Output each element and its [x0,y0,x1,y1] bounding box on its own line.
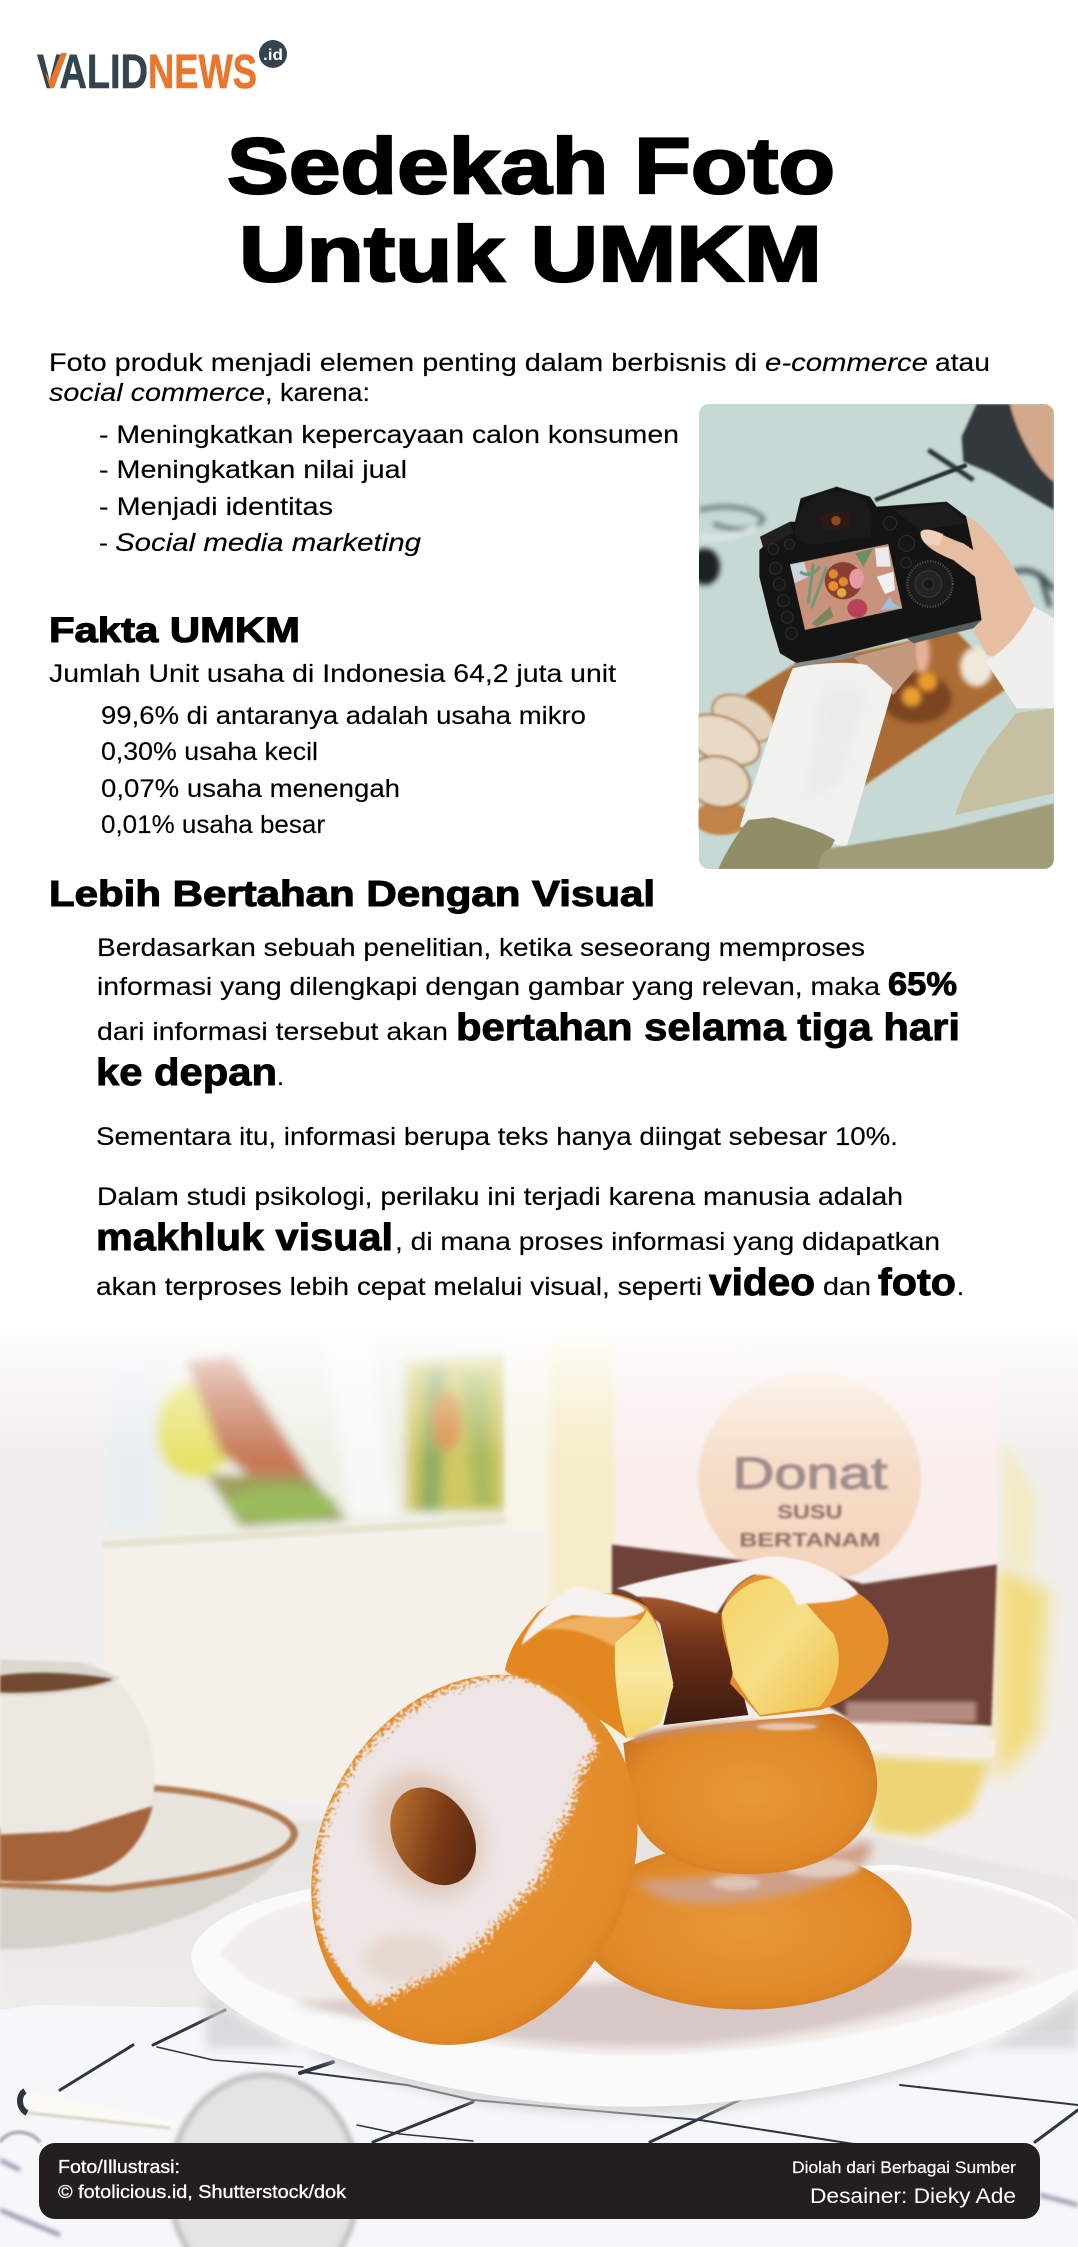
text block: UMKM facts: 0,07% usaha menengah [101,775,400,803]
paragraph: visual creatures: Dalam studi psikologi, perilaku ini terjadi karena manusia adalah [97,1183,903,1211]
text block: UMKM facts: 0,30% usaha kecil [101,738,318,766]
blurred cables and lens [690,507,1054,607]
broken donut [637,1593,748,1725]
white box [103,1517,557,1819]
footer bar [39,2143,1040,2219]
text block: UMKM facts: 0,01% usaha besar [101,811,325,839]
softbox and stand [962,404,1054,510]
paragraph: visual creatures: dan [823,1273,871,1301]
lower hand [853,642,917,695]
logo: VALIDNEWS.id: VALID [37,46,148,99]
paragraph: visual creatures: makhluk visual [96,1217,393,1259]
paragraph: research: bertahan selama tiga hari [456,1007,960,1049]
list: reasons: - [99,529,108,557]
paragraph: research: . [277,1063,284,1091]
top fade to white [0,1270,1078,1460]
list: reasons [99,421,679,557]
paragraph: visual creatures: foto [878,1262,956,1304]
donut package: BERTANAM [739,1530,880,1551]
title [227,121,835,298]
source and designer: Diolah dari Berbagai Sumber [792,2158,1016,2177]
list: reasons: - Meningkatkan kepercayaan calon konsumen [99,421,679,449]
left chunk [505,1592,673,1738]
donut package: Donat [733,1449,887,1499]
donut package [550,1336,1048,1836]
intro text [49,349,990,407]
photo: donuts on a plate [0,1270,1078,2247]
top stack: middle and broken donuts [505,1557,889,1874]
logo: VALIDNEWS.id: NEWS [148,46,257,99]
logo: VALIDNEWS.id: .id [263,47,283,64]
paragraph: visual creatures: video [709,1262,815,1304]
camera body [759,487,982,667]
paragraph: research: Berdasarkan sebuah penelitian, ketika seseorang memproses [97,934,865,962]
camera buttons [768,517,915,639]
white sleeves [985,607,1054,708]
paragraph: research [96,934,960,1094]
intro text: , karena: [265,379,370,407]
blurred picture frame [120,1352,508,1532]
paragraph: research: 65% [888,966,957,1002]
photo credit: Foto/Illustrasi: [58,2157,180,2177]
title: Untuk UMKM [239,209,822,298]
right hand [920,516,1034,657]
camera dial [907,561,953,607]
heading: Fakta UMKM: Fakta UMKM [49,611,300,650]
text block: UMKM facts: Jumlah Unit usaha di Indonesia 64,2 juta unit [49,660,616,688]
title: Sedekah Foto [227,121,835,210]
intro text: atau [935,349,990,377]
middle donut [623,1713,877,1874]
list: reasons: Social media marketing [115,529,421,557]
source and designer [792,2158,1016,2208]
paragraph: visual creatures: akan terproses lebih cepat melalui visual, seperti [96,1273,702,1301]
list: reasons: - Menjadi identitas [99,493,333,521]
text block: UMKM facts: 99,6% di antaranya adalah usaha mikro [101,702,586,730]
paragraph: research: dari informasi tersebut akan [97,1018,448,1046]
list: reasons: - Meningkatkan nilai jual [99,456,407,484]
powdered sugar on top [617,1557,858,1613]
bread slices [698,692,774,837]
intro text: Foto produk menjadi elemen penting dalam berbisnis di [49,349,757,377]
plate and bottom donut [191,1840,1078,2115]
paragraph: visual creatures: . [957,1273,964,1301]
intro text: social commerce [49,379,265,407]
photo backdrop, package and cup [0,1340,1078,2032]
strainer [170,2075,358,2247]
saucer and cup [0,1659,294,1949]
photo: hands holding a camera [679,404,1054,869]
paragraph: research: informasi yang dilengkapi dengan gambar yang relevan, maka [97,973,880,1001]
paragraph: research: ke depan [96,1052,277,1094]
paragraph: visual creatures [96,1183,964,1304]
photo credit: © fotolicious.id, Shutterstock/dok [58,2182,347,2202]
paragraph: visual creatures: , di mana proses informasi yang didapatkan [395,1228,940,1256]
table [222,1820,1075,1912]
right chunk [721,1573,889,1717]
donut package: SUSU [777,1502,843,1523]
photo credit [58,2157,347,2202]
intro text: e-commerce [765,349,928,377]
camera screen [790,544,902,630]
logo: VALIDNEWS.id [37,40,287,99]
source and designer: Desainer: Dieky Ade [810,2185,1016,2208]
wooden board [745,632,1010,788]
bottom donut [580,1840,912,2010]
heading: Lebih Bertahan Dengan Visual: Lebih Bertahan Dengan Visual [49,873,655,914]
paragraph: text recall: Sementara itu, informasi berupa teks hanya diingat sebesar 10%. [96,1123,898,1151]
checked cloth [0,2005,1078,2247]
text block: UMKM facts [49,660,616,839]
olive jacket [718,708,1054,869]
front sugared donut [263,1640,685,2079]
